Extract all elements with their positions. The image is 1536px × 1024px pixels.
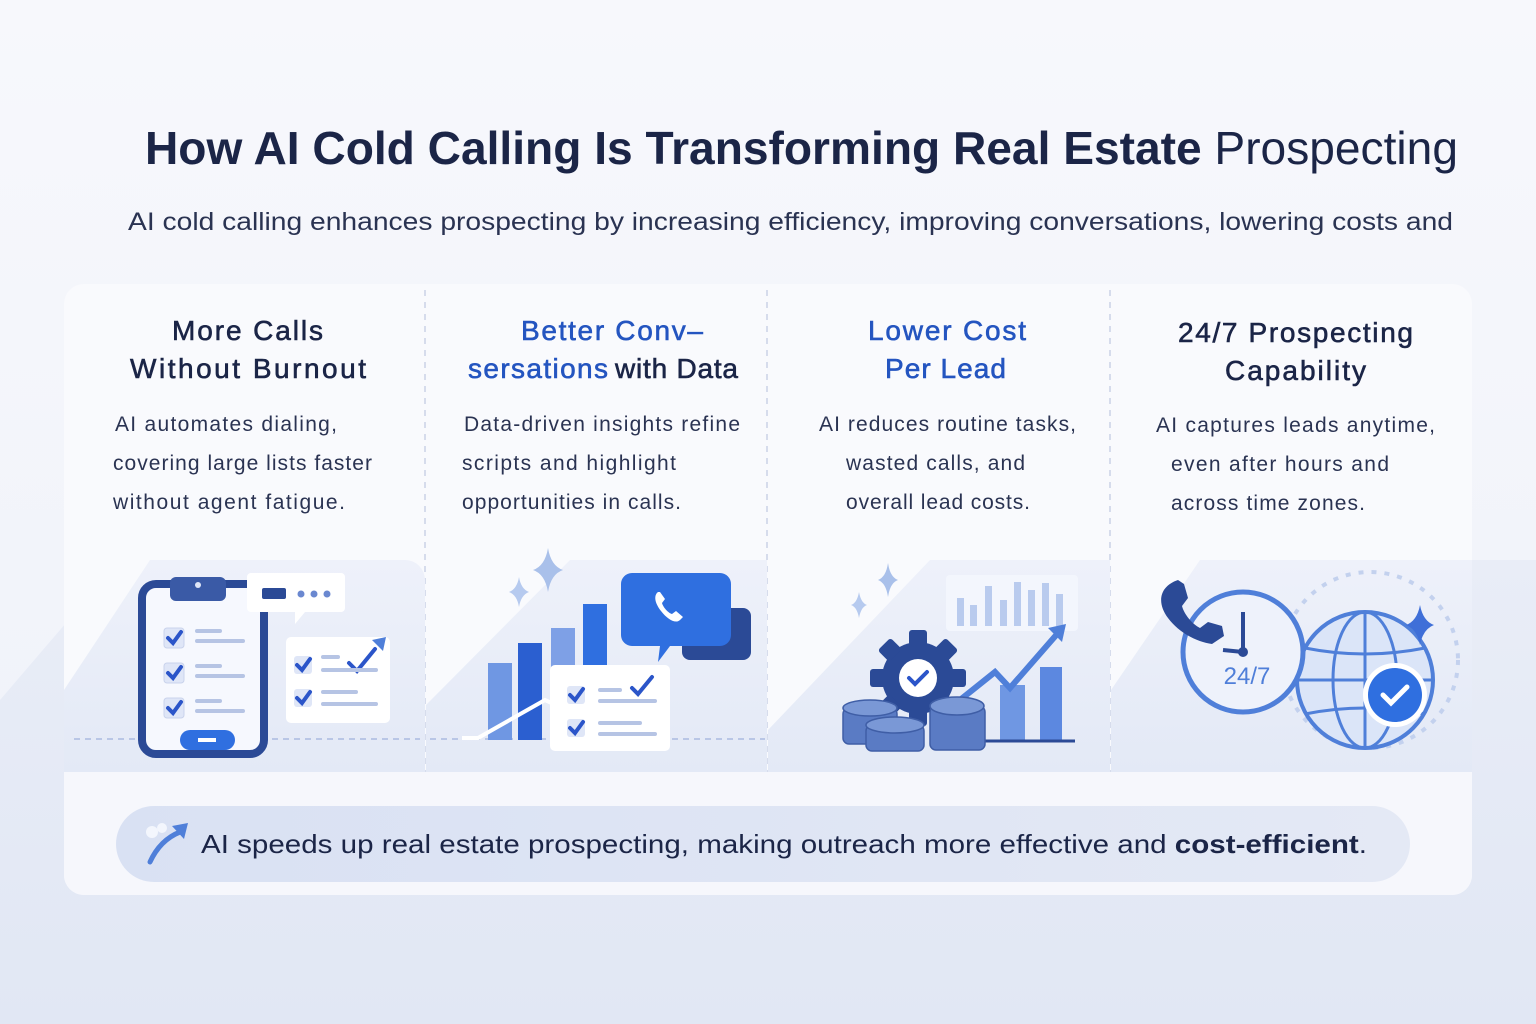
panel: more calls <box>64 315 425 772</box>
text: lower cost: overall lead costs. <box>846 491 1030 514</box>
heading: better conversations: with Data <box>614 353 738 384</box>
illustration: gear coins growth <box>768 560 1110 772</box>
main card <box>64 284 1472 895</box>
text: 24/7: across time zones. <box>1171 492 1365 515</box>
text: more calls: covering large lists faster <box>113 452 372 475</box>
text: better conversations: Data-driven insights refine <box>464 413 740 436</box>
text: lower cost: AI reduces routine tasks, <box>819 413 1076 436</box>
panel: 24/7 <box>1111 317 1472 772</box>
heading: better conversations: sersations <box>468 353 608 384</box>
icon: arrow <box>146 823 188 862</box>
illustration: phone checklist <box>64 560 425 772</box>
subtitle: AI cold calling enhances prospecting by increasing efficiency, improving conversations, lowering costs and <box>128 208 1453 236</box>
illustration: chart and call bubble <box>426 548 767 772</box>
heading: 24/7: 24/7 Prospecting <box>1178 317 1413 348</box>
text: lower cost: wasted calls, and <box>845 452 1025 475</box>
title: How AI Cold Calling Is Transforming Real Estate Prospecting <box>145 122 1458 174</box>
text: 24/7: even after hours and <box>1171 453 1389 476</box>
panel: better conversations <box>426 315 767 772</box>
heading: lower cost: Lower Cost <box>868 315 1026 346</box>
text: 24/7: AI captures leads anytime, <box>1156 414 1435 437</box>
heading: lower cost: Per Lead <box>885 353 1006 384</box>
heading: more calls: Without Burnout <box>130 353 366 384</box>
text: more calls: without agent fatigue. <box>112 491 345 514</box>
text: more calls: AI automates dialing, <box>115 413 337 436</box>
text: better conversations: scripts and highlight <box>462 452 676 475</box>
heading: 24/7: Capability <box>1225 355 1366 386</box>
text: better conversations: opportunities in calls. <box>462 491 681 514</box>
panel: lower cost <box>768 315 1110 772</box>
illustration: clock and globe <box>1111 560 1472 772</box>
heading: more calls: More Calls <box>172 315 323 346</box>
illustration: clock and globe: 24/7 <box>1224 663 1270 690</box>
callout: summary: AI speeds up real estate prospecting, making outreach more effective and cost-efficient . <box>201 829 1367 859</box>
callout: summary <box>116 806 1410 882</box>
heading: better conversations: Better Conv– <box>521 315 703 346</box>
